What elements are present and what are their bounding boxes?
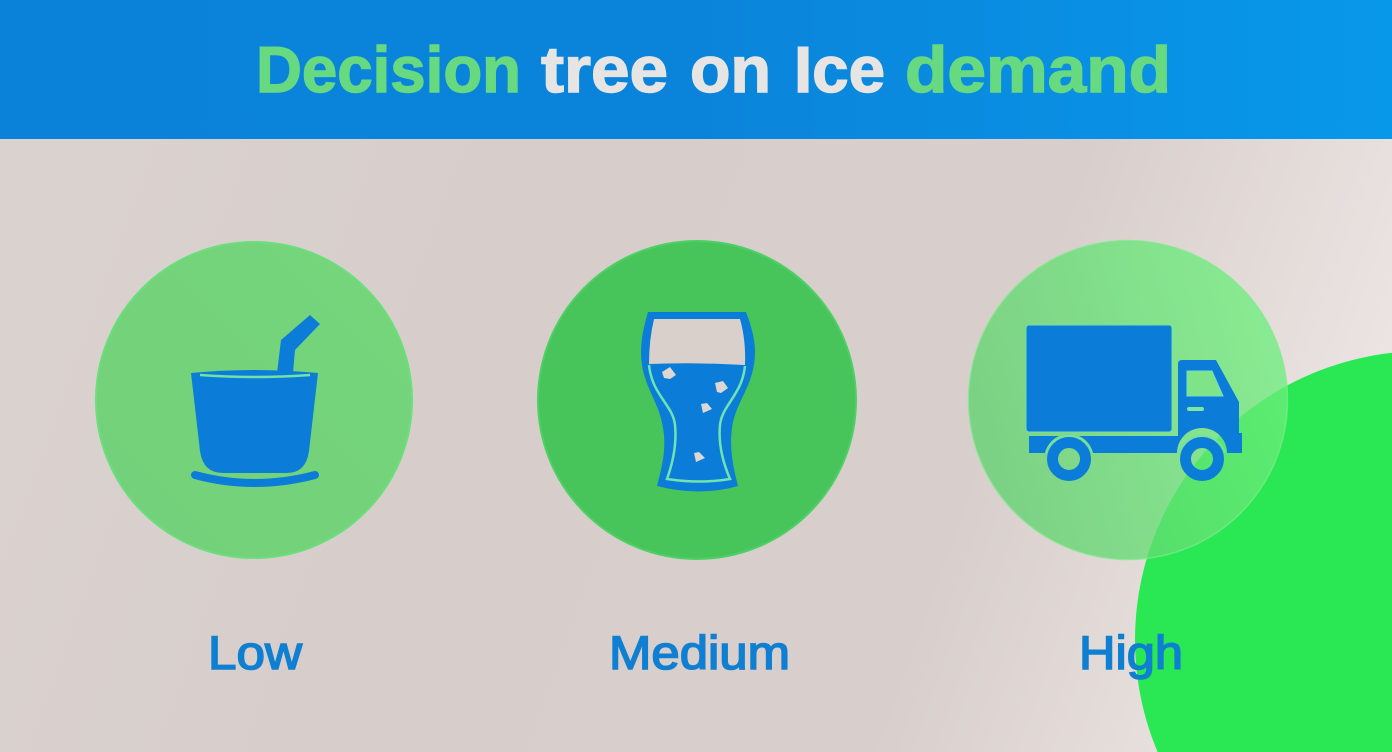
header band — [0, 0, 1392, 139]
title: on — [690, 33, 771, 106]
icon: delivery truck — [1026, 325, 1242, 476]
icon: cup with straw — [191, 315, 320, 483]
low circle — [96, 242, 412, 558]
title: Ice — [794, 33, 885, 106]
title: Decision — [256, 33, 521, 106]
panel: low demand — [96, 242, 412, 679]
panel: medium demand — [538, 241, 856, 679]
decorative large green circle — [1135, 353, 1392, 752]
label: medium: Medium — [609, 626, 790, 679]
label: low: Low — [208, 626, 303, 679]
title — [256, 33, 1171, 106]
icon: glass with ice — [641, 312, 755, 492]
title: tree — [541, 33, 668, 106]
title: demand — [905, 33, 1171, 106]
label: high: High — [1079, 626, 1183, 679]
medium circle — [538, 241, 856, 559]
panel: high demand — [968, 240, 1288, 679]
high circle — [968, 240, 1288, 560]
